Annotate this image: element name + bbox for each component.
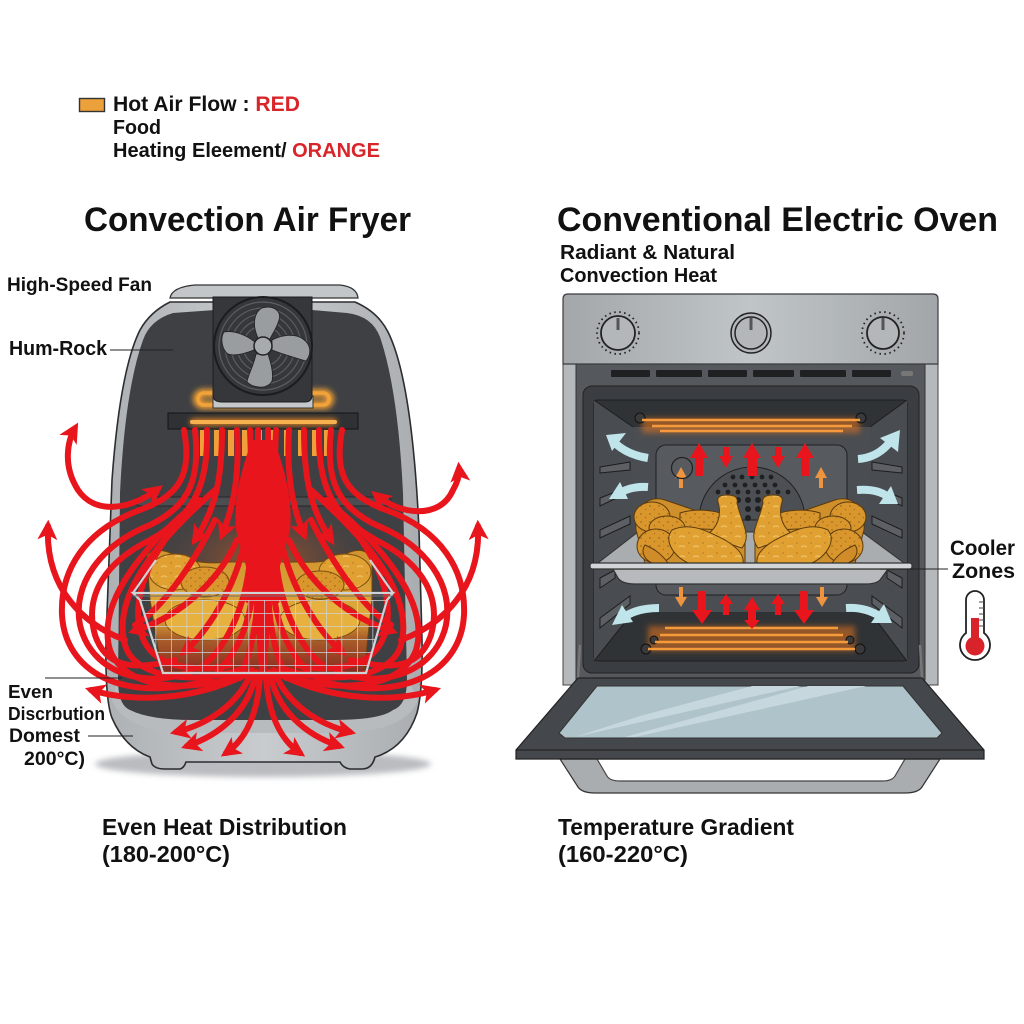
oven handle xyxy=(560,759,940,793)
base curve xyxy=(112,680,418,733)
vertical heater coils xyxy=(203,430,327,456)
leader: hum-rock xyxy=(110,349,173,351)
orange heat arrows xyxy=(675,467,828,607)
fan housing xyxy=(213,297,312,402)
tray back xyxy=(598,532,904,563)
label: cooler zones: Cooler xyxy=(950,537,1015,560)
caption: air fryer: (180-200°C) xyxy=(102,841,230,867)
door glass xyxy=(559,686,942,738)
fryer body xyxy=(106,302,422,769)
cool air arrows xyxy=(606,430,900,625)
red heat arrows xyxy=(690,443,814,629)
ground shadow xyxy=(95,751,431,777)
icon: thermometer xyxy=(960,591,990,660)
caption: air fryer: Even Heat Distribution xyxy=(102,814,347,840)
knob right xyxy=(862,312,904,354)
caption: oven: Temperature Gradient xyxy=(558,814,794,840)
title: oven: Conventional Electric Oven xyxy=(557,201,998,239)
food in basket xyxy=(147,550,372,672)
legend: food: Food xyxy=(113,117,161,139)
leader: cooler zones xyxy=(880,568,948,570)
fryer lid xyxy=(170,285,358,298)
vent slots xyxy=(611,370,913,377)
label: domest: 200°C) xyxy=(24,749,85,770)
right curl arrow xyxy=(376,468,459,511)
hot air flow arrows xyxy=(48,428,478,753)
heater loop xyxy=(197,393,330,405)
legend swatch xyxy=(80,98,104,112)
left curl arrow xyxy=(68,428,158,507)
legend: hot air flow: Hot Air Flow : RED xyxy=(113,93,300,116)
legend xyxy=(80,93,380,162)
oven subtitle: Radiant & Natural xyxy=(560,241,735,264)
chicken pieces xyxy=(634,495,866,563)
dark chamber xyxy=(118,310,407,720)
knob center xyxy=(731,313,771,353)
wire basket xyxy=(133,560,393,673)
knob left xyxy=(597,312,639,354)
fan grille xyxy=(214,297,312,395)
sensor circle xyxy=(672,458,692,478)
control panel xyxy=(563,294,938,364)
oven cavity xyxy=(583,386,919,673)
oven subtitle: Convection Heat xyxy=(560,264,717,287)
tray rim and pan xyxy=(590,563,912,584)
chamber glow xyxy=(133,490,393,630)
heater bracket xyxy=(213,396,313,408)
label: high-speed fan: High-Speed Fan xyxy=(7,275,152,296)
panel: air fryer xyxy=(45,285,478,777)
cavity interior xyxy=(594,400,907,661)
glass reflections xyxy=(575,686,866,737)
oven door xyxy=(516,678,984,759)
rack rails xyxy=(600,462,902,628)
title: air fryer: Convection Air Fryer xyxy=(84,201,411,239)
leader: distribution xyxy=(45,677,122,679)
heater tray xyxy=(168,413,358,429)
caption: oven: (160-220°C) xyxy=(558,841,688,867)
basket rail xyxy=(136,497,391,506)
label: even distribution: Even xyxy=(8,682,53,702)
oven front xyxy=(576,364,925,680)
fan arc with perforations xyxy=(699,467,805,521)
label: hum-rock: Hum-Rock xyxy=(9,338,108,360)
heater bar xyxy=(190,419,337,425)
door hinges xyxy=(578,645,922,678)
fan blades xyxy=(222,307,310,387)
label: domest: Domest xyxy=(9,726,81,747)
label: even distribution: Discrbution xyxy=(8,704,105,724)
bottom heating element xyxy=(641,626,865,654)
top heating element xyxy=(635,413,866,433)
legend: heating element: Heating Eleement/ ORANGE xyxy=(113,140,380,162)
leader: domest xyxy=(88,735,133,737)
oven body xyxy=(563,360,938,685)
fan hub xyxy=(254,337,272,355)
panel: oven xyxy=(516,294,984,793)
label: cooler zones: Zones xyxy=(952,560,1015,583)
back panel xyxy=(656,445,847,595)
central flow core xyxy=(235,440,291,680)
